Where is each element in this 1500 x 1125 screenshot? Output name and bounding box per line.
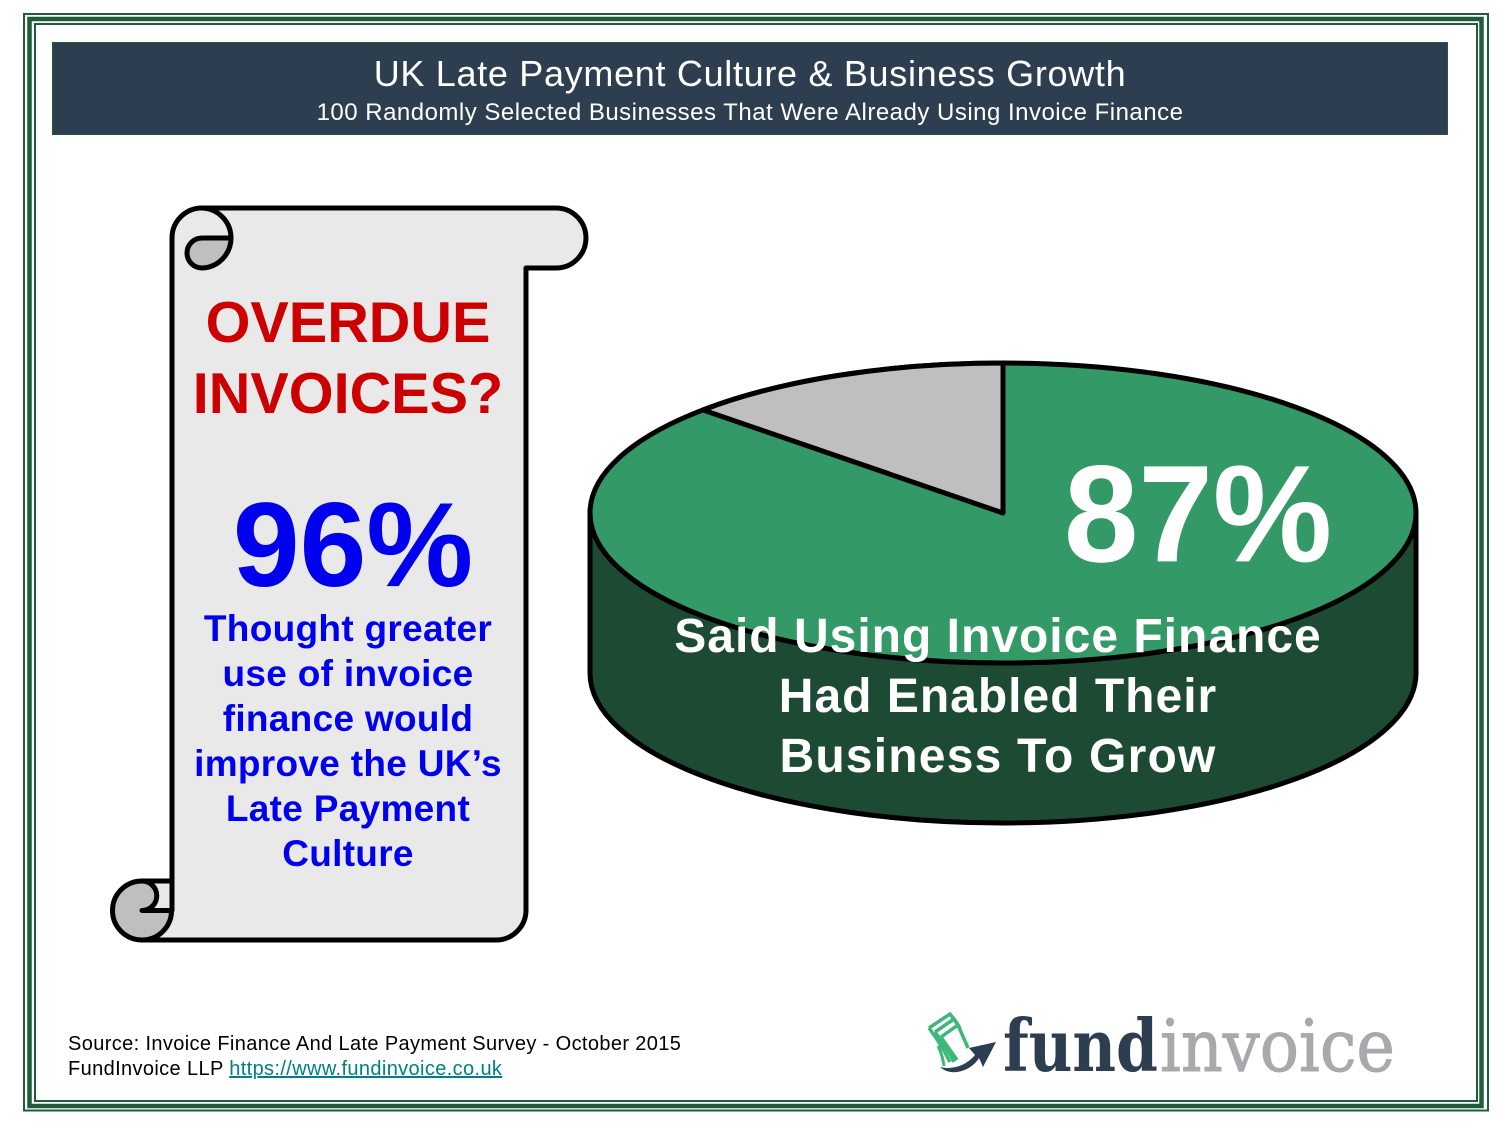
- pie side: [590, 513, 1416, 823]
- source note: [68, 1033, 681, 1080]
- pie caption: [674, 610, 1322, 783]
- subtitle: 100 Randomly Selected Businesses That Were Already Using Invoice Finance: [317, 99, 1183, 126]
- scroll heading: INVOICES?: [193, 362, 503, 426]
- scroll caption: [194, 608, 502, 874]
- source note: Source: Invoice Finance And Late Payment Survey - October 2015: [68, 1033, 681, 1055]
- top curl: [187, 238, 231, 268]
- icon: banknotes and arrow: [929, 1014, 996, 1072]
- scroll caption: Thought greater: [204, 608, 492, 649]
- logo: [928, 1005, 1395, 1085]
- scroll fill: [142, 208, 586, 940]
- source note: FundInvoice LLP https://www.fundinvoice.co.uk: [68, 1058, 502, 1080]
- scroll caption: Late Payment: [226, 788, 470, 829]
- title banner: [52, 42, 1448, 135]
- scroll caption: finance would: [223, 698, 473, 739]
- scroll statistic: 96%: [233, 478, 473, 612]
- scroll caption: Culture: [282, 833, 414, 874]
- pie caption: Business To Grow: [779, 730, 1217, 783]
- scroll caption: improve the UK’s: [194, 743, 502, 784]
- pie green slice: [590, 363, 1416, 663]
- pie grey slice: [703, 363, 1003, 513]
- scroll heading: [193, 291, 503, 426]
- title: UK Late Payment Culture & Business Growth: [374, 53, 1126, 94]
- pie caption: Said Using Invoice Finance: [674, 610, 1322, 663]
- scroll caption: use of invoice: [223, 653, 473, 694]
- pie caption: Had Enabled Their: [779, 670, 1217, 723]
- bottom curl: [113, 881, 172, 940]
- scroll outline: [142, 208, 586, 940]
- pie statistic: 87%: [1064, 438, 1332, 591]
- scroll heading: OVERDUE: [206, 291, 490, 355]
